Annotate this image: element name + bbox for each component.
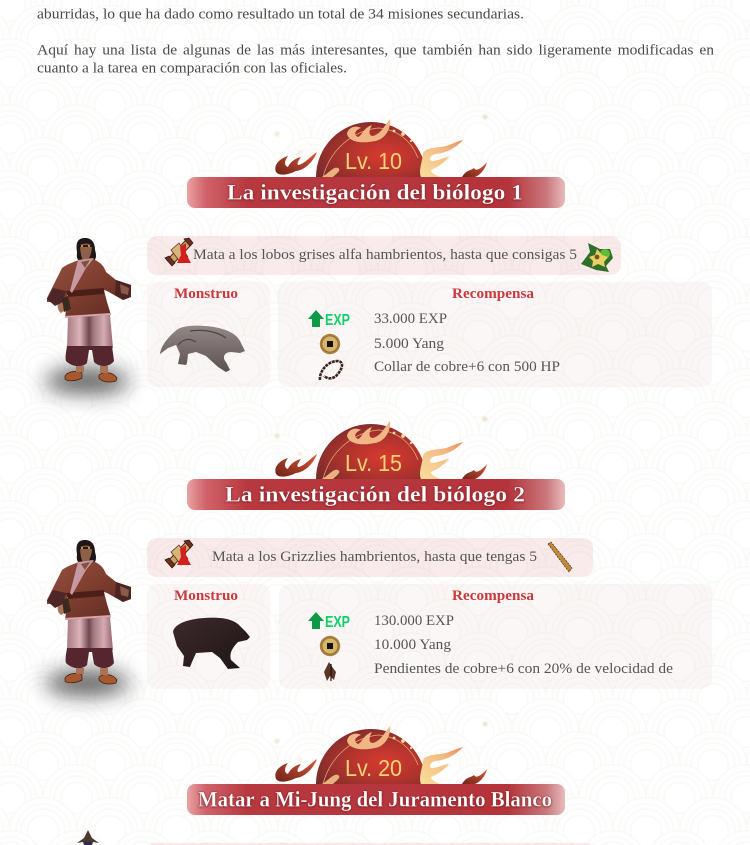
character: biologist 1: [45, 238, 131, 394]
task bar 1: [147, 236, 621, 275]
icon: exp: [308, 612, 350, 631]
icon: level 20 sun emblem: [275, 722, 487, 784]
intro text: Aquí hay una lista de algunas de las más interesantes, que también han sido ligeramente modificadas en: [37, 42, 715, 58]
panel: monster 2: [147, 584, 270, 689]
task bar 2: [147, 538, 593, 577]
intro text: aburridas, lo que ha dado como resultado un total de 34 misiones secundarias.: [37, 6, 524, 22]
icon: copper necklace: [320, 361, 342, 380]
reward exp: 33.000 EXP: [374, 311, 447, 327]
heading: Recompensa: Recompensa: [452, 286, 535, 302]
heading: Monstruo: Monstruo: [174, 588, 238, 604]
character: Mi-Jung headdress: [77, 830, 99, 845]
icon: level 10 sun emblem: Lv. 10: [345, 148, 402, 174]
task bar 3 top edge: [151, 843, 590, 845]
title banner 1: [187, 177, 565, 208]
icon: quest scroll: [165, 238, 193, 266]
heading: Monstruo: Monstruo: [174, 286, 238, 302]
reward exp: 130.000 EXP: [374, 613, 454, 629]
reward necklace: Collar de cobre+6 con 500 HP: [374, 359, 560, 375]
icon: copper earrings: [324, 662, 336, 681]
task text: Mata a los Grizzlies hambrientos, hasta que tengas 5: [212, 549, 537, 565]
character: biologist 2: [45, 540, 131, 696]
title banner 2: La investigación del biólogo 2: [225, 482, 525, 506]
title banner 2: [187, 479, 565, 510]
intro text: [37, 6, 715, 76]
reward yang: 5.000 Yang: [374, 336, 445, 352]
icon: grey wolf: [160, 326, 245, 372]
quest heading: level 20: [187, 722, 565, 815]
icon: wooden stick: [548, 542, 572, 572]
icon: flower item: [581, 243, 613, 272]
reward yang: 10.000 Yang: [374, 637, 452, 653]
icon: exp: [308, 310, 350, 329]
icon: grizzly bear: [173, 618, 250, 669]
icon: quest scroll: [165, 540, 193, 568]
icon: level 20 sun emblem: Lv. 20: [345, 755, 402, 781]
icon: level 10 sun emblem: [275, 115, 487, 177]
panel: monster 1: [147, 282, 270, 387]
panel: reward 1: [278, 282, 712, 387]
title banner 1: La investigación del biólogo 1: [227, 180, 523, 204]
intro text: cuanto a la tarea en comparación con las oficiales.: [37, 60, 347, 76]
panel: reward 2: [279, 584, 712, 689]
icon: yang coin: [320, 334, 340, 354]
title banner 3: Matar a Mi-Jung del Juramento Blanco: [198, 786, 552, 812]
reward earrings: Pendientes de cobre+6 con 20% de velocidad de: [374, 661, 673, 677]
heading: Recompensa: Recompensa: [452, 588, 535, 604]
icon: yang coin: [320, 636, 340, 656]
quest heading: level 10: [187, 115, 565, 208]
icon: level 15 sun emblem: Lv. 15: [345, 450, 402, 476]
quest heading: level 15: [187, 417, 565, 510]
task text: Mata a los lobos grises alfa hambrientos, hasta que consigas 5: [193, 247, 577, 263]
icon: level 15 sun emblem: [275, 417, 487, 479]
